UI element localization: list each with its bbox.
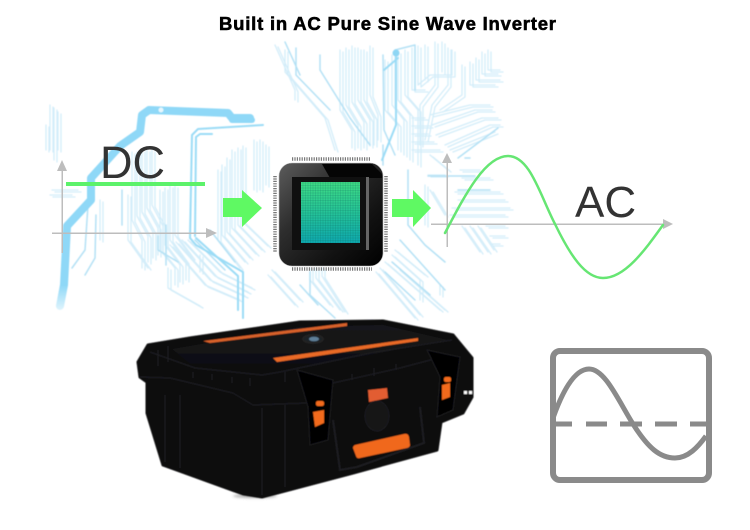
orange top strips: [203, 323, 347, 343]
AC label: AC: [575, 178, 636, 227]
top emblem: [303, 335, 323, 343]
microchip icon: [275, 159, 386, 269]
mid blue circuit traces: [72, 42, 498, 318]
case lid top: [172, 325, 448, 375]
DC line: [66, 182, 205, 186]
AC chart: [431, 153, 673, 278]
case shadow: [233, 494, 277, 498]
icon dashed baseline: [556, 422, 706, 426]
title: Built in AC Pure Sine Wave Inverter: [219, 13, 556, 34]
thick main trace: [60, 110, 250, 306]
chip pins: [275, 159, 386, 269]
orange handle: [353, 434, 410, 458]
left latch: [297, 370, 333, 445]
DC label: DC: [100, 137, 165, 188]
AC sine wave: [445, 156, 663, 278]
pale circuit traces: [46, 42, 513, 320]
handle frame: [333, 407, 424, 470]
case lid seam and ridges: [140, 340, 452, 495]
chip die: [301, 182, 360, 243]
icon frame: [553, 351, 709, 480]
circuit board background traces: [46, 42, 513, 320]
icon sine wave: [553, 369, 706, 458]
carrying case product: [138, 321, 472, 498]
DC axes: [52, 160, 217, 253]
AC axes: [431, 153, 673, 247]
case body: [138, 321, 472, 497]
chip body: [279, 163, 383, 266]
brand tag: [368, 388, 388, 402]
arrow: chip to AC: [392, 190, 431, 227]
arrow: DC to chip: [223, 190, 262, 227]
strong blue circuit traces: [190, 57, 398, 318]
fade overlay on lower left trace: [30, 285, 110, 320]
front lock dial: [365, 401, 389, 431]
side notch: [464, 391, 467, 394]
DC chart: [52, 137, 217, 253]
right latch: [427, 350, 460, 417]
sine wave icon: [553, 351, 709, 480]
